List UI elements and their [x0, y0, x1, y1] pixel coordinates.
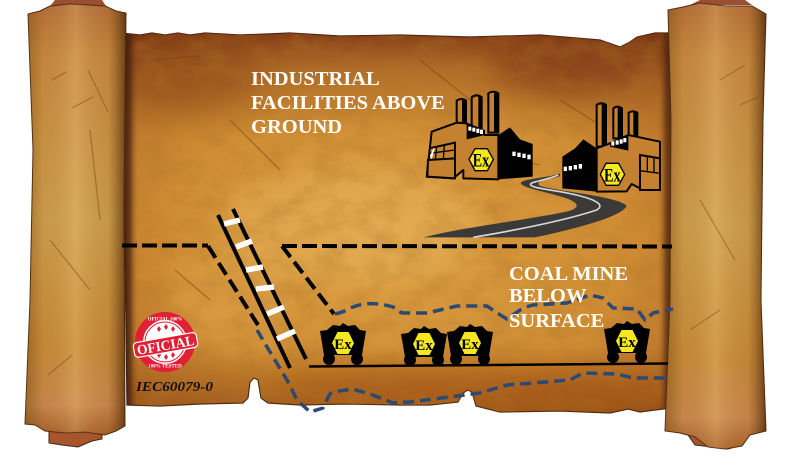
icon: mine cart 2: Ex [415, 338, 433, 354]
ground line: dashed surface [122, 246, 672, 325]
standard label: IEC60079-0 [135, 380, 213, 395]
panel: right scroll roller [665, 0, 766, 449]
heading: industrial facilities: GROUND [251, 116, 342, 138]
icon: mine cart 2 [401, 326, 447, 366]
icon: winding road [423, 173, 627, 237]
stamp: official [133, 316, 199, 370]
stamp: official: 100% TESTED [148, 364, 182, 370]
icon: factory left [427, 92, 533, 179]
heading: industrial facilities: FACILITIES ABOVE [251, 92, 445, 114]
icon: mine cart 4: Ex [618, 335, 636, 351]
icon: mine cart 3 [447, 324, 493, 365]
stamp: official: OFICIAL [136, 334, 196, 359]
icon: mine cart 1: Ex [334, 337, 352, 353]
heading: coal mine: SURFACE [509, 310, 604, 332]
icon: mine cart 4 [604, 321, 650, 363]
mine track [309, 364, 668, 366]
stamp: official: OFICIAL 100% [148, 318, 182, 322]
icon: factory right [562, 103, 660, 192]
icon: Ex hexagon: Ex [473, 151, 490, 172]
coal seam: dashed blue outline [257, 295, 673, 412]
icon: ladder [218, 209, 306, 368]
icon: mine cart 1 [320, 323, 366, 365]
icon: mine cart 3: Ex [461, 337, 479, 353]
panel: left scroll roller [25, 0, 126, 447]
heading: industrial facilities: INDUSTRIAL [251, 68, 380, 90]
heading: coal mine: BELOW [509, 285, 587, 307]
heading: coal mine: COAL MINE [509, 263, 628, 285]
panel: parchment sheet [118, 30, 676, 415]
icon: Ex hexagon: Ex [604, 166, 621, 187]
